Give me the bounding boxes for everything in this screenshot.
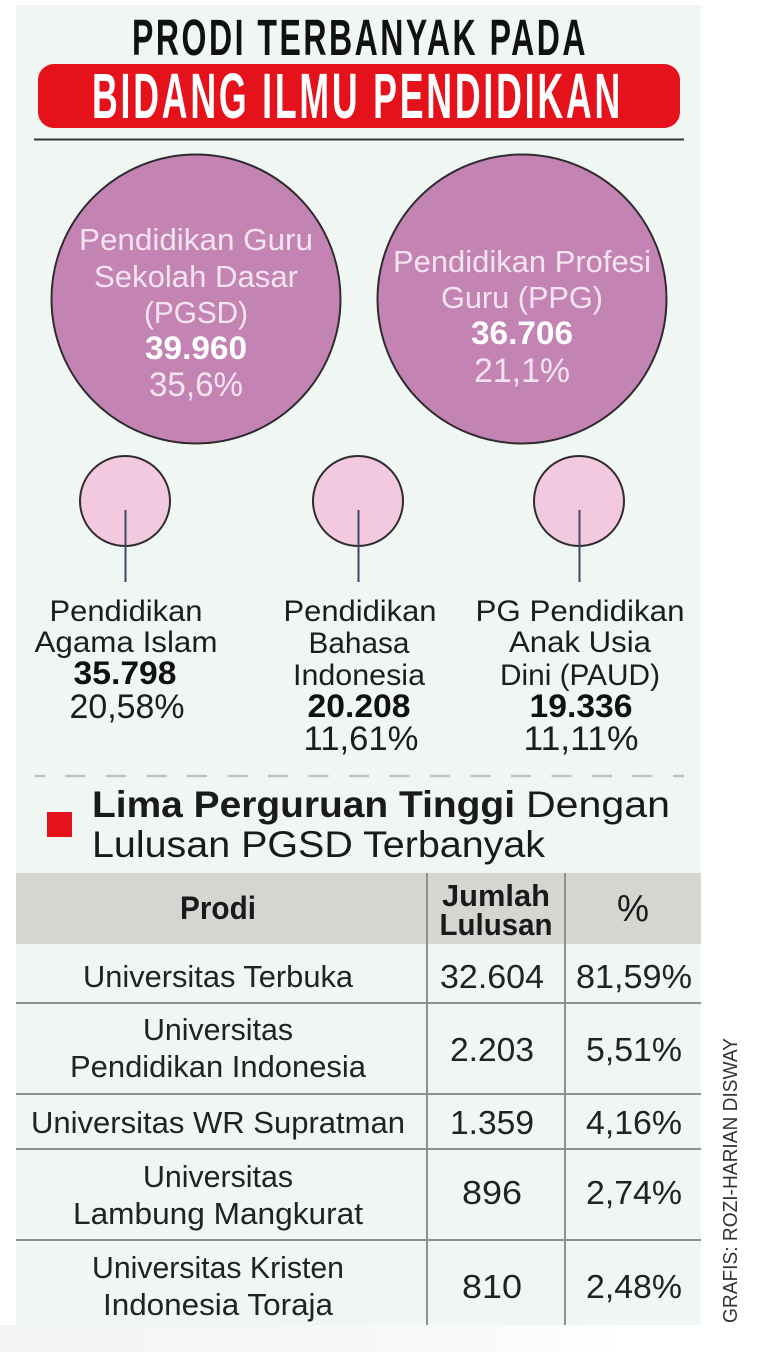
small bubble: PG PAUD: PG Pendidikan xyxy=(476,595,684,628)
small bubble: Pendidikan Bahasa Indonesia xyxy=(284,456,436,758)
bubble: PGSD: Sekolah Dasar xyxy=(94,259,298,294)
row: Universitas WR Supratman: 4,16% xyxy=(586,1104,682,1141)
small bubble: Pendidikan Agama Islam: Agama Islam xyxy=(34,626,218,659)
icon: red square xyxy=(47,812,72,837)
bubble: PPG xyxy=(378,154,666,444)
bubble: PPG: Pendidikan Profesi xyxy=(393,244,651,279)
small bubble: Pendidikan Bahasa Indonesia: Pendidikan xyxy=(284,595,436,628)
small bubble: Pendidikan Bahasa Indonesia: Bahasa xyxy=(308,627,410,660)
table header: Prodi xyxy=(180,890,256,926)
section heading: Lulusan PGSD Terbanyak xyxy=(92,824,546,865)
row: Universitas WR Supratman: Universitas WR Supratman xyxy=(31,1105,405,1140)
row: Universitas Pendidikan Indonesia: Universitas xyxy=(143,1012,293,1047)
row: Universitas Pendidikan Indonesia: 5,51% xyxy=(586,1031,682,1068)
table header xyxy=(16,873,701,944)
row: Universitas Terbuka: 32.604 xyxy=(440,958,544,995)
small bubble: PG PAUD: 19.336 xyxy=(530,688,632,724)
bubble: PPG: 36.706 xyxy=(471,315,573,351)
table xyxy=(16,873,701,1325)
small bubble: Pendidikan Bahasa Indonesia: Indonesia xyxy=(293,659,425,692)
row: Universitas Lambung Mangkurat xyxy=(73,1159,682,1231)
table header: Lulusan xyxy=(440,907,552,942)
table header: % xyxy=(617,888,649,930)
bubble: PGSD xyxy=(52,154,340,444)
row: Universitas WR Supratman xyxy=(31,1104,682,1141)
row: Universitas Lambung Mangkurat: Universitas xyxy=(143,1159,293,1194)
credit: GRAFIS: ROZI-HARIAN DISWAY xyxy=(720,1038,742,1323)
small bubble: PG PAUD: Dini (PAUD) xyxy=(500,659,660,692)
row: Universitas Lambung Mangkurat: 2,74% xyxy=(586,1174,682,1211)
row: Universitas Pendidikan Indonesia: 2.203 xyxy=(450,1031,534,1068)
row: Universitas Kristen Indonesia Toraja: 810 xyxy=(462,1268,522,1305)
row: Universitas Lambung Mangkurat: Lambung Mangkurat xyxy=(73,1196,363,1231)
row: Universitas Pendidikan Indonesia: Pendidikan Indonesia xyxy=(70,1049,367,1084)
small bubble: PG PAUD: 11,11% xyxy=(524,720,638,758)
section heading: Lima Perguruan Tinggi xyxy=(92,784,515,825)
title xyxy=(38,9,680,132)
small bubble: Pendidikan Agama Islam: 20,58% xyxy=(70,688,184,726)
small bubble: Pendidikan Bahasa Indonesia: 11,61% xyxy=(304,720,418,758)
section heading: Dengan xyxy=(526,784,670,825)
row: Universitas Lambung Mangkurat: 896 xyxy=(462,1174,522,1211)
row: Universitas Kristen Indonesia Toraja: Indonesia Toraja xyxy=(103,1287,334,1322)
small bubble: Pendidikan Bahasa Indonesia: 20.208 xyxy=(308,688,410,724)
row: Universitas Pendidikan Indonesia xyxy=(70,1012,682,1084)
section heading xyxy=(47,784,670,865)
small bubble: PG PAUD xyxy=(476,456,684,758)
bottom shadow band xyxy=(0,1325,620,1352)
bubble: PGSD: 35,6% xyxy=(149,366,243,404)
small bubble: Pendidikan Agama Islam: Pendidikan xyxy=(50,595,202,628)
row: Universitas Terbuka: Universitas Terbuka xyxy=(83,959,354,994)
bubble: PGSD: Pendidikan Guru xyxy=(79,222,313,257)
row: Universitas WR Supratman: 1.359 xyxy=(450,1104,534,1141)
row: Universitas Terbuka xyxy=(83,958,692,995)
bubble: PPG: 21,1% xyxy=(474,352,570,390)
row: Universitas Terbuka: 81,59% xyxy=(576,958,692,995)
small bubble: PG PAUD: Anak Usia xyxy=(509,626,651,659)
row: Universitas Kristen Indonesia Toraja: Universitas Kristen xyxy=(92,1250,344,1285)
table header: Jumlah xyxy=(442,878,550,913)
bubble: PGSD: (PGSD) xyxy=(144,295,248,330)
small bubble: Pendidikan Agama Islam: 35.798 xyxy=(74,655,176,691)
row: Universitas Kristen Indonesia Toraja: 2,48% xyxy=(586,1268,682,1305)
row: Universitas Kristen Indonesia Toraja xyxy=(92,1250,682,1322)
small bubble: Pendidikan Agama Islam xyxy=(34,456,218,726)
bubble: PGSD: 39.960 xyxy=(145,330,247,366)
bubble: PPG: Guru (PPG) xyxy=(441,280,603,315)
